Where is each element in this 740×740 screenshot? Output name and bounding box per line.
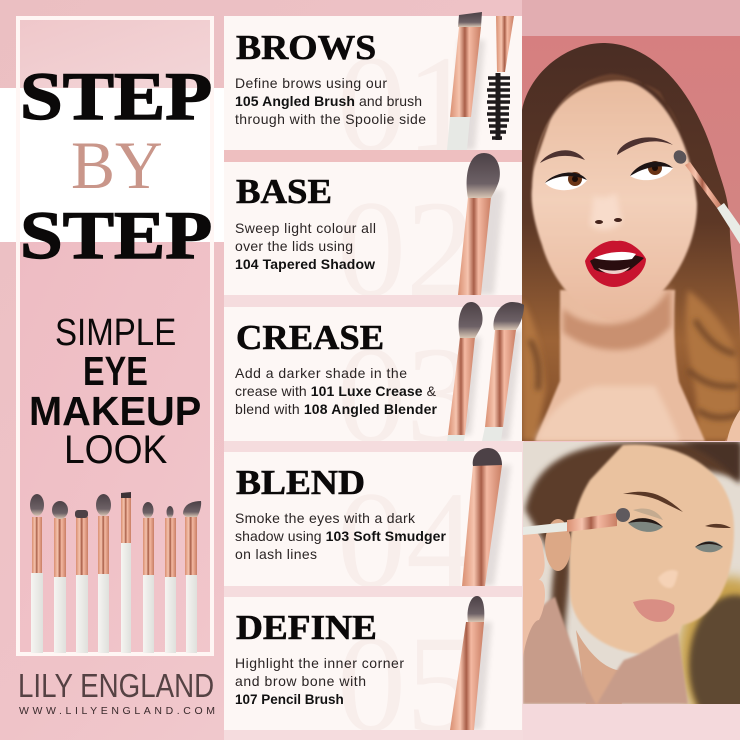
text: crease instructions: blend with 108 Angled Blender [235, 401, 438, 417]
text: brows instructions [235, 75, 426, 127]
text: crease instructions: crease with 101 Luxe Crease & [235, 383, 437, 399]
brush set photo [30, 492, 201, 653]
frame interior top [16, 16, 214, 88]
icon: pencil brush [450, 596, 492, 730]
step number 03: 03 [337, 318, 475, 471]
logo: lily england: WWW.LILYENGLAND.COM [19, 705, 215, 717]
title: step by step: BY [71, 128, 163, 203]
subtitle: simple eye makeup look: EYE [83, 348, 148, 394]
text: brows instructions: 105 Angled Brush and brush [235, 93, 422, 109]
panel: brows [224, 12, 522, 150]
text: base instructions: over the lids using [235, 238, 353, 254]
step number 04: 04 [337, 463, 475, 616]
heading: crease: CREASE [236, 318, 384, 357]
heading: brows: BROWS [236, 28, 376, 67]
lighter band between lower cards and page bottom [224, 295, 524, 740]
step number 01: 01 [337, 27, 475, 180]
text: define instructions: Highlight the inner corner [235, 655, 404, 671]
panel: define [224, 596, 522, 740]
title: step by step: STEP [20, 197, 212, 273]
icon: tapered brush [458, 153, 504, 295]
frame interior bottom [16, 242, 214, 656]
text: brows instructions: through with the Spoolie side [235, 111, 426, 127]
text: blend instructions: on lash lines [235, 546, 317, 562]
text: define instructions: and brow bone with [235, 673, 366, 689]
text: crease instructions [235, 365, 438, 417]
panel: base [224, 153, 522, 295]
shadow beneath photos [523, 704, 740, 740]
icon: crease and blender brushes [447, 302, 524, 441]
subtitle: simple eye makeup look [29, 311, 201, 472]
text: base instructions: 104 Tapered Shadow [235, 256, 375, 272]
text: define instructions: 107 Pencil Brush [235, 692, 344, 707]
panel: blend [224, 448, 522, 586]
panel: crease [224, 302, 524, 441]
subtitle: simple eye makeup look: SIMPLE [55, 311, 176, 354]
logo: lily england: LILY ENGLAND [18, 668, 214, 705]
icon: smudger brush [462, 448, 511, 586]
white title band [0, 88, 224, 242]
heading: blend: BLEND [236, 463, 365, 502]
text: blend instructions [235, 510, 447, 562]
photo: woman applying eyeshadow [523, 442, 740, 704]
subtitle: simple eye makeup look: LOOK [64, 428, 168, 472]
step number 02: 02 [337, 172, 475, 325]
text: base instructions: Sweep light colour all [235, 220, 376, 236]
text: base instructions [235, 220, 376, 272]
white frame [18, 18, 212, 654]
heading: base: BASE [236, 172, 332, 211]
text: brows instructions: Define brows using our [235, 75, 387, 91]
subtitle: simple eye makeup look: MAKEUP [29, 387, 201, 434]
title: step by step: STEP [20, 58, 212, 134]
heading: define: DEFINE [236, 608, 377, 647]
title: step by step [20, 58, 212, 273]
text: blend instructions: shadow using 103 Soft Smudger [235, 528, 447, 544]
text: define instructions [235, 655, 404, 707]
text: crease instructions: Add a darker shade in the [235, 365, 407, 381]
photo: model applying brush [522, 36, 740, 441]
icon: angled brush and spoolie [447, 12, 514, 150]
text: blend instructions: Smoke the eyes with a dark [235, 510, 416, 526]
